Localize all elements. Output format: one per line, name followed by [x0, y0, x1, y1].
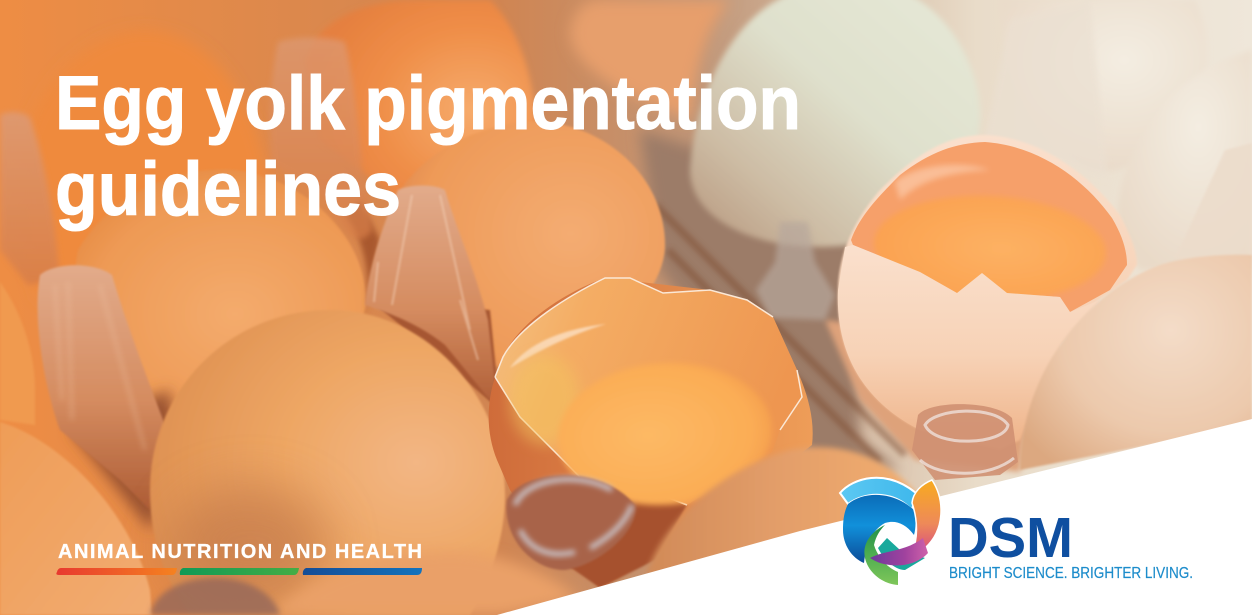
broken shell front	[838, 245, 1100, 445]
gap behind centre cup	[370, 300, 500, 410]
red bar	[56, 568, 177, 575]
tricolour bar	[56, 568, 422, 575]
inner shell gloss	[510, 324, 606, 368]
green bar	[180, 568, 299, 575]
blue bar	[303, 568, 422, 575]
plastic cup: clear nub	[912, 404, 1018, 480]
egg: bottom middle	[647, 447, 925, 580]
plastic cup: centre	[365, 186, 498, 410]
dark blue petal	[843, 495, 916, 563]
egg: left edge	[0, 282, 35, 425]
plastic cup: top left	[0, 112, 60, 285]
interior upper glow	[895, 165, 990, 200]
plastic cup: top	[270, 38, 372, 239]
egg: orange left	[75, 169, 366, 410]
egg: pale green	[690, 0, 980, 247]
plastic cup: bottom left rim	[150, 578, 280, 615]
DSM wordmark: DSM	[948, 506, 1073, 570]
DSM logo	[840, 478, 1193, 585]
egg: top left	[20, 30, 270, 300]
shaded side of the big egg	[170, 485, 330, 605]
left cup highlights	[55, 282, 145, 450]
cracked pale egg	[838, 135, 1137, 450]
cup highlights	[374, 195, 478, 360]
gap behind lower eggs	[70, 390, 180, 530]
plastic cup: right	[1175, 143, 1252, 262]
title line 2: guidelines	[55, 147, 401, 232]
purple petal	[870, 538, 928, 565]
title	[55, 61, 801, 232]
egg: top peach	[570, 0, 730, 120]
egg: lower right	[1020, 255, 1252, 470]
plastic cup: mid tray	[756, 222, 835, 320]
tray rails	[655, 205, 905, 462]
plastic cup: left	[38, 265, 165, 510]
orange petal	[912, 480, 941, 552]
teal petal	[878, 538, 925, 570]
clear nub highlights	[920, 411, 1014, 473]
title line 1: Egg yolk pigmentation	[55, 61, 801, 146]
inner shell rim highlight	[495, 278, 802, 505]
green petal	[864, 525, 898, 585]
plastic cup: foreground nub	[506, 475, 635, 570]
egg: bottom	[270, 551, 580, 615]
shell exterior	[489, 278, 813, 588]
nub highlights	[515, 479, 632, 554]
tray floor behind the cracked eggs	[640, 130, 900, 470]
light blue petal	[840, 478, 916, 510]
egg: large orange centre	[395, 122, 665, 370]
shell interior	[851, 142, 1127, 312]
tagline: BRIGHT SCIENCE. BRIGHTER LIVING.	[949, 565, 1193, 582]
peach tray base under pale egg	[825, 320, 1030, 472]
shell interior	[495, 278, 802, 505]
egg: pale right	[1118, 50, 1252, 270]
egg: bottom left	[0, 422, 152, 615]
plastic cup: right top	[985, 0, 1108, 180]
egg white glow	[510, 355, 580, 445]
yolk	[871, 190, 1109, 306]
egg: top centre	[305, 0, 537, 200]
white diagonal corner	[497, 419, 1252, 615]
egg: bottom centre left	[150, 310, 505, 615]
cracked brown egg	[489, 278, 813, 588]
shell exterior and back rim	[838, 135, 1137, 450]
egg: pale top right	[1000, 0, 1207, 172]
dark gap between eggs	[345, 200, 380, 320]
yolk	[553, 356, 777, 512]
logo symbol	[840, 478, 941, 585]
dark lower shell	[560, 477, 687, 588]
division label: ANIMAL NUTRITION AND HEALTH	[58, 541, 422, 563]
